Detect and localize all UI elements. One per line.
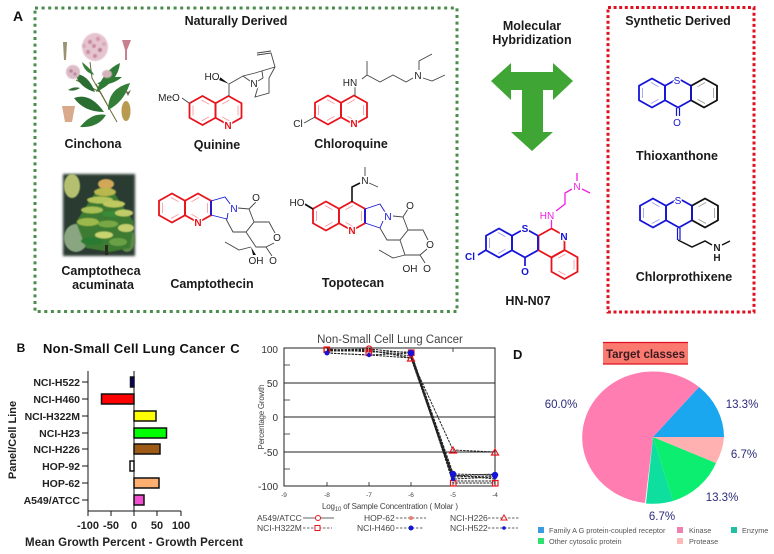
value axis labels: 50 (151, 520, 163, 532)
arrow: three-way hybridization arrow (491, 63, 573, 151)
axis numbers: 0 (272, 413, 278, 424)
panel label B: B (17, 341, 26, 355)
structure: camptothecin: O (273, 233, 281, 244)
structure: chlorprothixene: N (713, 243, 721, 254)
bars (102, 377, 166, 505)
percentage labels: 13.3% (706, 492, 738, 504)
structure: topotecan: O (426, 240, 434, 251)
structure: topotecan: HO (290, 198, 305, 209)
category labels: NCI-H23 (39, 428, 80, 440)
structure: chloroquine (293, 54, 445, 130)
legend: A549/ATCC (257, 513, 302, 523)
legend: HOP-62 (364, 513, 395, 523)
x axis title: Mean Growth Percent - Growth Percent (25, 537, 243, 549)
heading: molecular hybridization: Molecular (503, 19, 561, 33)
heading: synthetic derived: Synthetic Derived (625, 14, 731, 28)
legend: Enzyme (742, 526, 768, 535)
structure: HN-N07: HN (540, 211, 554, 222)
percentage labels: 6.7% (649, 511, 675, 523)
pie chart (582, 371, 724, 504)
panel label C: C (230, 341, 240, 356)
percentage labels: 6.7% (731, 449, 757, 461)
structure: camptothecin: OH (248, 256, 264, 267)
photo: camptotheca acuminata tree (63, 174, 135, 256)
structure: camptothecin (159, 193, 281, 267)
structure: quinine: MeO (158, 93, 180, 104)
panel label A: A (13, 8, 23, 24)
y axis title: Panel/Cell Line (7, 401, 19, 479)
structure: topotecan: OH (402, 264, 418, 275)
structure: HN-N07: S (522, 224, 529, 235)
axis numbers: -100 (258, 482, 278, 493)
structure: topotecan: N (348, 226, 356, 237)
heading: bar chart title: Non-Small Cell Lung Cancer (43, 341, 225, 356)
structure: chlorprothixene: S (675, 196, 682, 207)
panel label D: D (513, 347, 522, 362)
axis numbers: 50 (267, 379, 278, 390)
label: camptothecin: Camptothecin (170, 277, 254, 291)
structure: camptothecin: N (194, 218, 202, 229)
percentage labels (545, 399, 758, 523)
category labels: NCI-H522 (33, 377, 80, 389)
category labels: NCI-H226 (33, 444, 80, 456)
legend: Other cytosolic protein (549, 537, 622, 546)
panel: synthetic derived (608, 8, 754, 312)
structure: topotecan: O (423, 264, 431, 275)
axis numbers: -50 (264, 448, 278, 459)
legend: NCI-H522 (450, 523, 488, 533)
structure: topotecan (290, 167, 434, 275)
label: quinine: Quinine (194, 138, 240, 152)
legend: Family A G protein-coupled receptor (549, 526, 666, 535)
structure: chlorprothixene: H (713, 253, 721, 264)
structure: thioxanthone (639, 76, 717, 129)
structure: HN-N07: N (560, 232, 568, 243)
x tick labels: -7 (366, 492, 372, 499)
y axis title: Percentage Growth (257, 384, 266, 450)
line chart: dose response (257, 334, 519, 533)
legend: NCI-H226 (450, 513, 488, 523)
label: camptotheca acuminata (61, 264, 142, 292)
legend: Protease (689, 537, 718, 546)
chart title: Non-Small Cell Lung Cancer (317, 334, 463, 346)
structure: thioxanthone: S (674, 76, 681, 87)
structure: chloroquine: Cl (293, 119, 303, 130)
legend: NCI-H322M (257, 523, 302, 533)
structure: camptothecin: O (269, 256, 277, 267)
structure: chloroquine: HN (343, 78, 357, 89)
x tick labels: -8 (324, 492, 330, 499)
heading: molecular hybridization (492, 19, 572, 47)
heading: target classes: Target classes (606, 349, 685, 361)
label: camptotheca acuminata: acuminata (72, 278, 135, 292)
axis numbers: 100 (261, 345, 278, 356)
value axis labels: -100 (77, 520, 99, 532)
label: camptotheca acuminata: Camptotheca (61, 264, 142, 278)
category labels: A549/ATCC (24, 495, 80, 507)
x tick labels: -4 (492, 492, 498, 499)
label: thioxanthone: Thioxanthone (636, 149, 718, 163)
percentage labels: 60.0% (545, 399, 577, 411)
heading: naturally derived: Naturally Derived (185, 14, 287, 28)
structure: chloroquine: N (350, 119, 358, 130)
legend (538, 526, 768, 546)
x tick labels: -6 (408, 492, 414, 499)
x tick labels (281, 492, 498, 499)
structure: quinine (158, 51, 275, 132)
label: chloroquine: Chloroquine (314, 137, 388, 151)
x tick labels: -9 (281, 492, 287, 499)
structure: HN-N07 (465, 173, 590, 279)
structure: quinine: N (224, 121, 232, 132)
structure: camptothecin: O (252, 193, 260, 204)
structure: chloroquine: N (414, 71, 422, 82)
percentage labels: 13.3% (726, 399, 758, 411)
x axis title: of Sample Concentration ( Molar ) (341, 502, 458, 511)
legend: Kinase (689, 526, 711, 535)
heading: target classes (603, 342, 688, 364)
value axis labels: 100 (172, 520, 190, 532)
series markers (324, 346, 498, 486)
value axis labels: 0 (131, 520, 137, 532)
category labels: NCI-H460 (33, 394, 80, 406)
structure: camptothecin: N (230, 204, 238, 215)
structure: quinine: HO (204, 72, 220, 83)
panel: target classes pie (538, 342, 768, 546)
legend (257, 513, 519, 533)
x tick labels: -5 (450, 492, 456, 499)
structure: HN-N07: Cl (465, 252, 475, 263)
structure: topotecan: O (406, 201, 414, 212)
series lines (327, 349, 495, 483)
label: cinchona: Cinchona (65, 137, 123, 151)
label: HN-N07: HN-N07 (505, 294, 551, 308)
x axis title: 10 (335, 507, 342, 513)
structure: chlorprothixene (640, 196, 730, 264)
legend: NCI-H460 (357, 523, 395, 533)
axis numbers (258, 345, 278, 493)
panel: naturally derived (35, 8, 457, 312)
structure: topotecan: N (361, 176, 369, 187)
illustration: cinchona plant (62, 33, 131, 127)
structure: HN-N07: N (573, 182, 581, 193)
category labels (24, 377, 80, 507)
bar chart: growth percent by cell line (7, 371, 243, 549)
structure: HN-N07: O (521, 267, 529, 278)
label: chlorprothixene: Chlorprothixene (636, 270, 732, 284)
structure: quinine: N (250, 79, 258, 90)
heading: molecular hybridization: Hybridization (492, 33, 572, 47)
category labels: HOP-92 (42, 461, 80, 473)
label: topotecan: Topotecan (322, 276, 384, 290)
category labels: HOP-62 (42, 478, 80, 490)
value axis labels (77, 520, 190, 532)
category labels: NCI-H322M (25, 411, 80, 423)
structure: thioxanthone: O (673, 118, 681, 129)
structure: topotecan: N (384, 212, 392, 223)
x axis title: Log (322, 502, 335, 511)
value axis labels: -50 (103, 520, 119, 532)
